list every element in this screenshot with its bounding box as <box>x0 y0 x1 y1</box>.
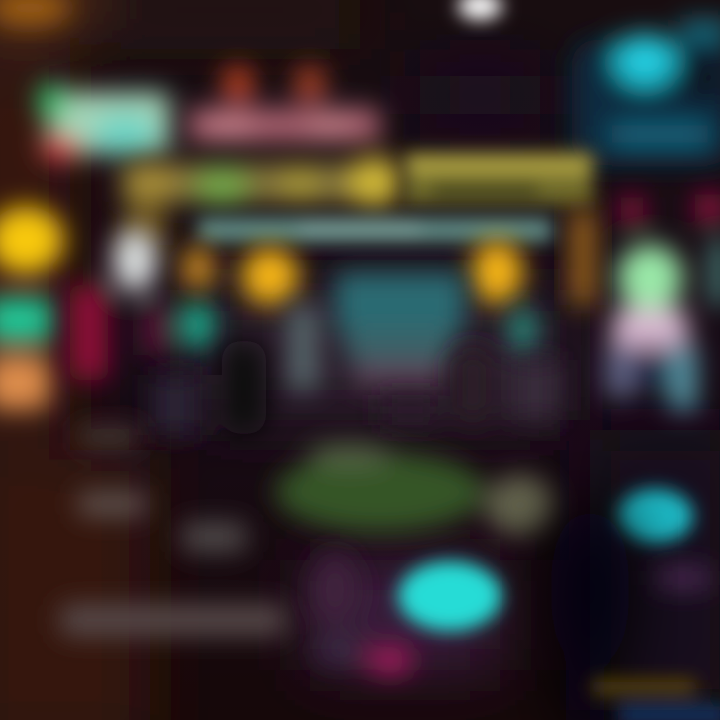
olive sign post <box>570 210 596 305</box>
top left orange glow <box>0 0 70 24</box>
teal band <box>198 218 552 242</box>
green gaming table <box>275 444 554 535</box>
bottom right lights <box>592 680 720 720</box>
magenta floor lights <box>311 552 710 675</box>
foreground silhouette <box>550 500 630 720</box>
right slot machine <box>606 194 720 410</box>
green and white sign <box>38 82 170 162</box>
pink marquee band <box>188 66 380 142</box>
top right neon sign <box>572 22 720 165</box>
cyan screens <box>398 489 693 631</box>
olive sign <box>405 153 593 205</box>
amber lamps <box>181 240 523 305</box>
ceiling light <box>458 0 502 20</box>
central teal screen <box>288 272 537 390</box>
yellow marquee row <box>122 156 401 245</box>
left yellow lights <box>0 206 64 410</box>
white and red columns <box>70 228 215 380</box>
crowd silhouettes <box>152 340 560 435</box>
grey stairs <box>60 428 286 636</box>
